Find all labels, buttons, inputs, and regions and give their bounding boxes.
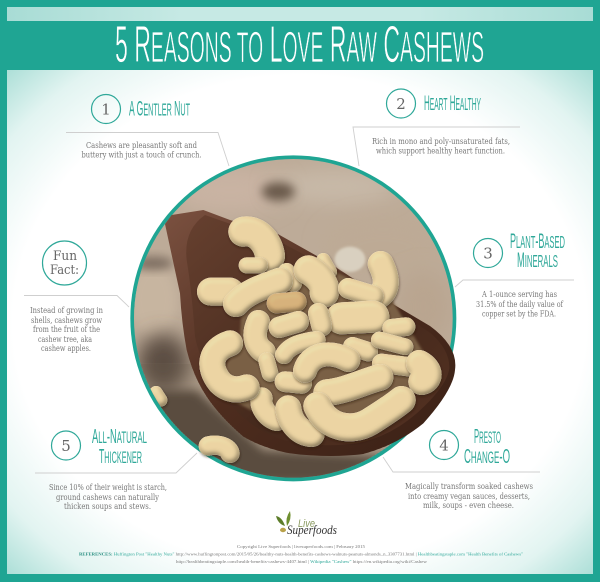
number badge: [386, 89, 416, 118]
heading: A GENTLER NUT: [129, 98, 190, 120]
fun fact badge: [42, 241, 86, 285]
fun fact: [24, 241, 129, 353]
connector line: [353, 127, 520, 166]
copyright and references: Copyright Live Superfoods | livesuperfoods.com | February 2015: [237, 544, 366, 549]
pile shadow base: [213, 263, 430, 437]
item 2: heart healthy: [353, 89, 520, 166]
number badge: [52, 431, 80, 460]
logo text: Superfoods: [287, 522, 337, 537]
heading: [92, 426, 147, 468]
small blurred cashew: [156, 393, 161, 400]
heading: PLANT-BASED: [510, 230, 565, 253]
copyright and references: REFERENCES: Huffington Post "Healthy Nuts" http://www.huffingtonpost.com/2015/05/26/healthy-nuts-health-benefits-cashews-walnuts-peanuts-almonds_n_3307731.html | Healthbeatingstaple.com "Health Benefits of Cashews": [79, 552, 523, 556]
body text: [49, 483, 167, 511]
spoon bowl interior: [186, 215, 449, 445]
body text: A 1-ounce serving has: [481, 290, 557, 299]
connector line: [24, 296, 129, 307]
body text: Magically transform soaked cashews: [405, 482, 533, 491]
number badge: [92, 94, 120, 124]
fun fact badge: Fact:: [50, 263, 79, 278]
top pale band: [7, 7, 593, 21]
body text: [372, 137, 510, 156]
body text: [405, 482, 533, 510]
item 5: all-natural thickener: [35, 426, 197, 511]
body text: copper set by the FDA.: [482, 310, 556, 318]
number badge: [430, 430, 458, 460]
connector line: [383, 457, 540, 472]
number badge: 1: [101, 100, 111, 118]
wooden spoon: [165, 210, 455, 456]
number badge: 3: [483, 244, 493, 262]
body text: ground cashews can naturally: [56, 493, 159, 502]
title: 5 REASONS TO LOVE RAW CASHEWS: [115, 16, 484, 74]
cashew pile: [208, 231, 430, 453]
body text: [30, 306, 103, 353]
body text: Cashews are pleasantly soft and: [86, 141, 197, 150]
heading: [464, 426, 510, 468]
body text: into creamy vegan sauces, desserts,: [408, 492, 530, 501]
body text: thicken soups and stews.: [64, 502, 151, 511]
heading: PRESTO: [474, 426, 501, 448]
connector line: [66, 132, 229, 166]
body text: [476, 290, 564, 318]
burlap background: [130, 150, 457, 483]
number badge: 5: [61, 437, 71, 455]
connector line: [35, 453, 197, 473]
body text: which support healthy heart function.: [376, 146, 505, 156]
body text: cashew tree, aka: [38, 335, 92, 344]
item 1: a gentler nut: [66, 94, 229, 166]
number badge: 2: [396, 95, 406, 113]
body text: Instead of growing in: [30, 306, 103, 315]
loose cashew: [208, 445, 230, 453]
icon: leaves: [276, 511, 291, 532]
body text: Rich in mono and poly-unsaturated fats,: [372, 137, 510, 146]
connector line: [455, 280, 574, 287]
heading: MINERALS: [517, 249, 558, 272]
body text: buttery with just a touch of crunch.: [82, 150, 202, 160]
number badge: 4: [439, 436, 449, 454]
logo text: [287, 518, 337, 537]
heading: THICKENER: [99, 446, 142, 468]
body text: Since 10% of their weight is starch,: [49, 483, 167, 492]
heading: [510, 230, 565, 272]
body text: [82, 141, 202, 160]
body text: shells, cashews grow: [31, 316, 102, 325]
heading: HEART HEALTHY: [424, 92, 481, 115]
item 4: presto change-o: [383, 426, 540, 510]
copyright and references: [79, 544, 523, 564]
central photo of cashews: [130, 150, 457, 483]
body text: 31.5% of the daily value of: [476, 300, 564, 309]
photo ring: [130, 155, 456, 481]
body text: from the fruit of the: [33, 325, 100, 334]
fun fact badge: Fun: [53, 249, 78, 264]
body text: milk, soups - even cheese.: [423, 501, 514, 510]
heading: ALL-NATURAL: [92, 426, 147, 448]
item 3: plant-based minerals: [455, 230, 574, 318]
logo text: Live: [298, 518, 315, 530]
heading: CHANGE-O: [464, 446, 510, 468]
copyright and references: http://healthbeatingstaple.com/health-benefits-cashews-4407.html | Wikipedia "Cashew" https://en.wikipedia.org/wiki/Cashew: [176, 559, 428, 564]
logo: live superfoods: [276, 511, 337, 537]
body text: cashew apples.: [41, 344, 91, 353]
